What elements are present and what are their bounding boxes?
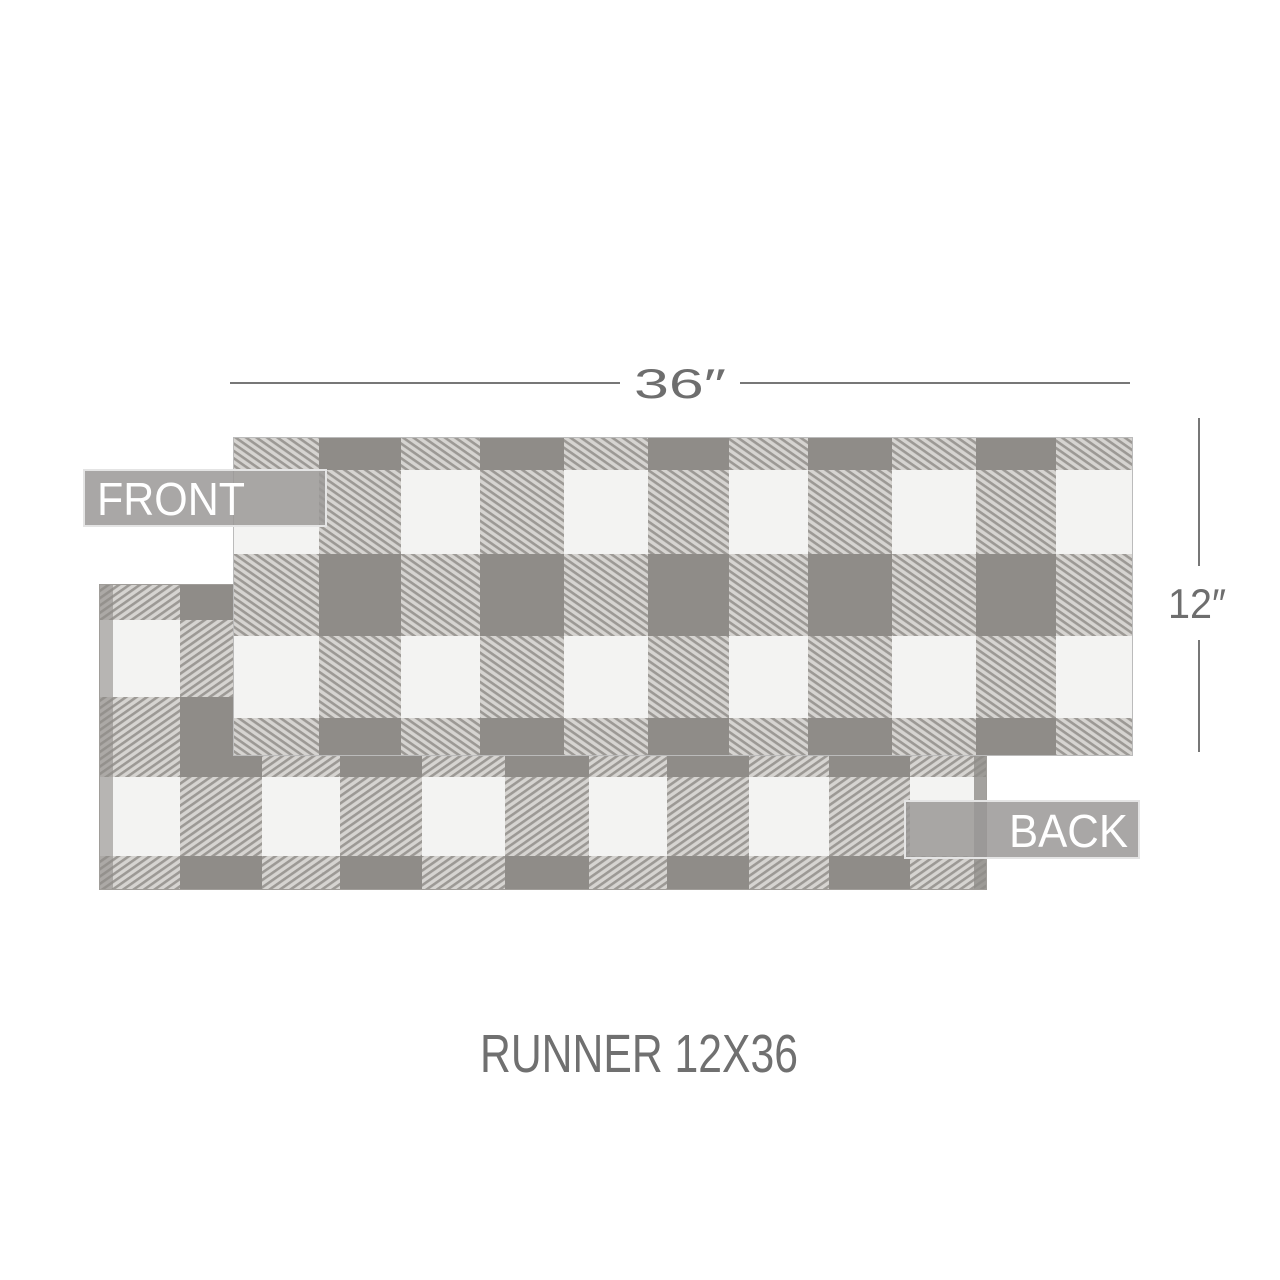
- dimension: width 36 inches: 36″: [634, 360, 726, 407]
- runner: front: [233, 437, 1133, 756]
- runner: back: [99, 584, 987, 890]
- caption: RUNNER 12X36: [480, 1024, 798, 1084]
- label: BACK: BACK: [1009, 805, 1128, 857]
- dimension: height 12 inches: 12″: [1168, 580, 1226, 627]
- label: BACK: [905, 801, 1139, 858]
- label: FRONT: [84, 470, 326, 526]
- label: FRONT: FRONT: [97, 473, 245, 525]
